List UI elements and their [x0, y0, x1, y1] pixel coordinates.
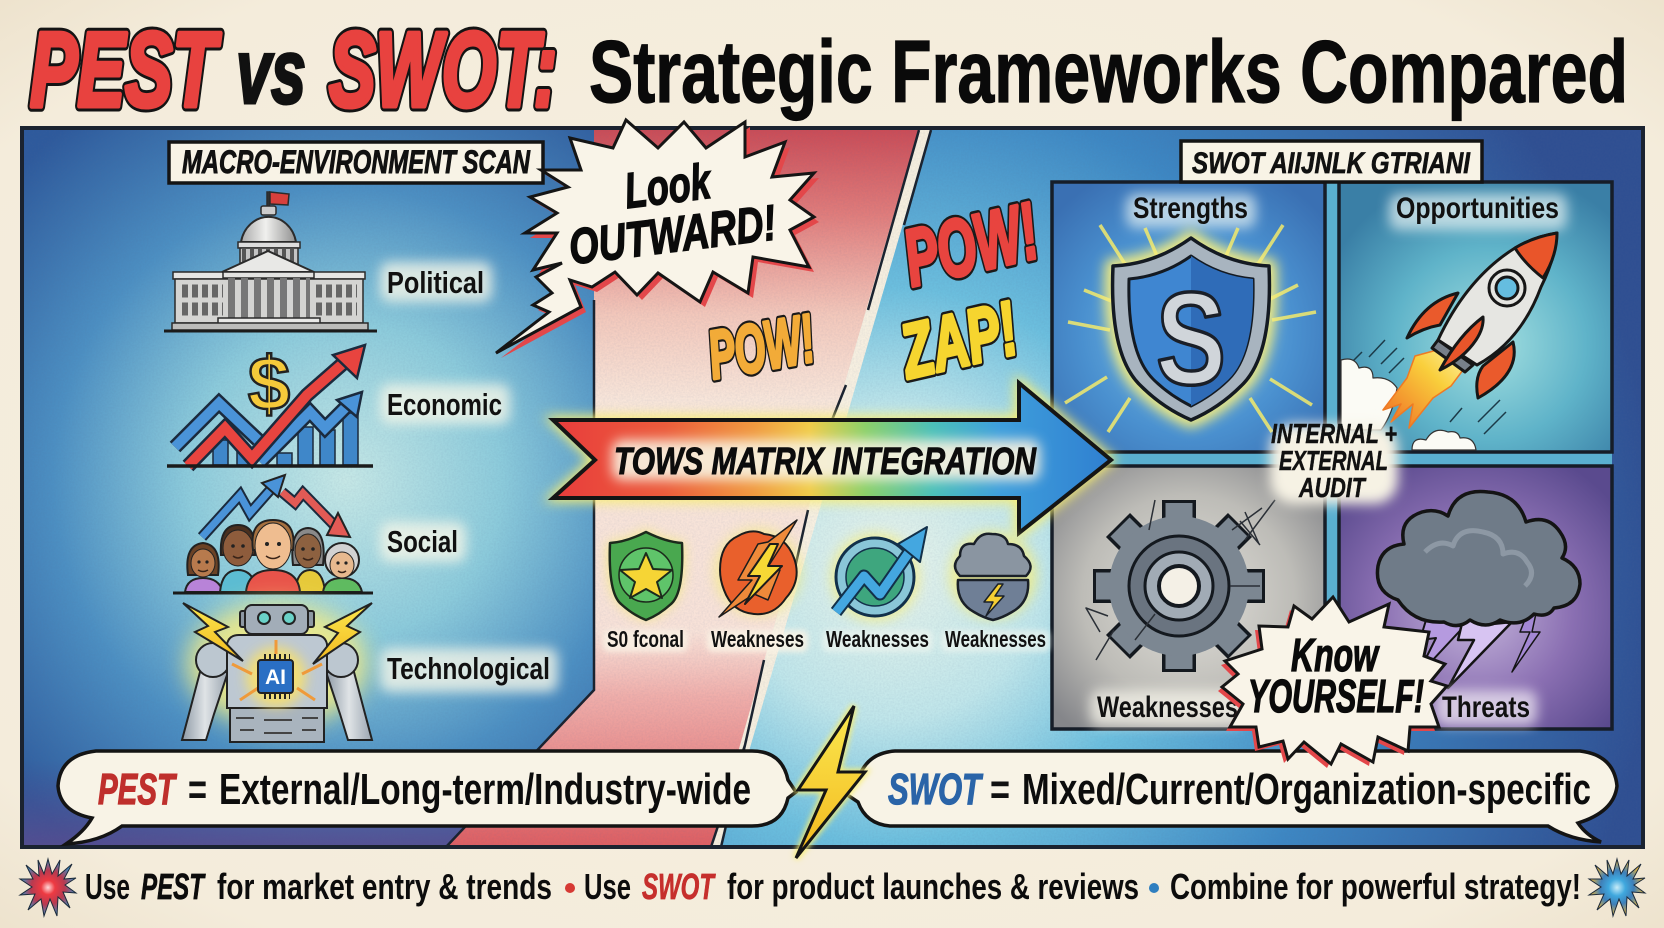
icon: rocket — [1341, 233, 1557, 450]
callout: internal + external audit: INTERNAL + — [1271, 418, 1397, 449]
label: Economic: Economic — [387, 387, 502, 422]
icon: storm cloud and lightning — [1377, 492, 1580, 688]
purple lower edge of PEST side — [24, 787, 462, 845]
icon: society group with trend arrows — [173, 475, 373, 593]
icon: green star shield — [608, 530, 684, 620]
speech bubble: PEST summary: External/Long-term/Industry-wide — [219, 765, 751, 814]
icon: cracked gear — [1086, 500, 1275, 672]
quadrant: Strengths — [1052, 182, 1325, 452]
takeaway segments: Use — [85, 866, 130, 907]
label: macro-environment scan: MACRO-ENVIRONMENT SCAN — [182, 144, 531, 180]
takeaway segments: Use — [584, 866, 631, 907]
icon: central lightning bolt — [796, 706, 865, 858]
arrow: TOWS matrix integration: TOWS MATRIX INTEGRATION — [614, 441, 1037, 483]
takeaway segments: for market entry & trends — [217, 866, 552, 907]
takeaway segments: PEST — [141, 866, 206, 907]
title word: SWOT: SWOT: — [329, 11, 557, 129]
sound effect: POW red: POW! — [896, 186, 1046, 303]
icon: AI robot — [182, 603, 372, 742]
label: macro-environment scan — [169, 142, 543, 183]
icon: economic chart: $ — [248, 342, 290, 427]
burst text — [1248, 629, 1424, 722]
label: weaknesses 1: Weakneses — [711, 626, 804, 652]
bottom takeaway line — [20, 859, 1645, 916]
icon: capitol building — [164, 192, 377, 331]
sound effect: POW orange — [703, 300, 820, 394]
label: weaknesses 2: Weaknesses — [826, 626, 929, 652]
speech bubble: PEST summary: PEST — [98, 765, 177, 814]
label: Social: Social — [387, 524, 458, 559]
title word: SWOT: SWOT: — [329, 11, 557, 129]
speech bubble: SWOT summary — [843, 751, 1617, 842]
label: Political: Political — [387, 265, 484, 300]
burst text: OUTWARD! — [566, 194, 779, 275]
icon: flame bolt badge — [714, 520, 802, 617]
quadrant: Weaknesses — [1052, 466, 1325, 729]
takeaway segments: for product launches & reviews — [727, 866, 1139, 907]
quadrant: Threats — [1339, 466, 1612, 729]
label: Technological — [380, 648, 558, 692]
panel: SWOT blue side — [721, 128, 1643, 847]
burst: Look OUTWARD — [496, 120, 819, 358]
label: weaknesses 3: Weaknesses — [945, 626, 1046, 652]
panel: PEST blue side — [22, 128, 594, 847]
title word: PEST — [30, 11, 222, 129]
speech bubble: PEST summary: = — [188, 765, 207, 814]
icon: green circle arrow — [831, 527, 927, 621]
burst text: Look — [621, 153, 715, 219]
takeaway segments: SWOT — [642, 866, 716, 907]
icon: red starburst — [20, 859, 76, 916]
speech bubble: SWOT summary: = — [990, 765, 1010, 814]
title — [30, 11, 1628, 129]
takeaway segments — [85, 866, 1581, 907]
title word: PEST: PEST — [30, 11, 222, 129]
sound effect: ZAP yellow: ZAP! — [892, 286, 1025, 395]
burst: Know YOURSELF — [1218, 597, 1447, 768]
burst text — [560, 146, 779, 275]
speech bubble: SWOT summary: SWOT — [888, 765, 983, 814]
opportunities heading: Opportunities — [1396, 192, 1559, 225]
sound effect: ZAP yellow — [892, 286, 1025, 395]
TOWS strategy icons row — [603, 520, 1050, 652]
icon: shield — [1065, 225, 1316, 432]
quadrant frame — [1052, 182, 1612, 729]
callout: internal + external audit: AUDIT — [1298, 472, 1367, 503]
label: SWOT analysis strip — [1181, 141, 1482, 182]
icon: AI robot: AI — [265, 666, 286, 689]
speech bubble: PEST summary — [58, 751, 796, 844]
burst text: YOURSELF! — [1248, 670, 1424, 722]
sound effect: POW red — [896, 186, 1046, 303]
title word: vs: vs — [236, 21, 306, 123]
sound effect: POW orange: POW! — [703, 300, 820, 394]
threats heading: Threats — [1442, 691, 1530, 724]
icon: economic chart — [167, 342, 373, 466]
quadrant: Opportunities — [1339, 182, 1612, 452]
watercolor grain — [171, 130, 1072, 845]
red central wedge — [446, 128, 919, 847]
sound effect: POW red: POW! — [896, 186, 1046, 303]
sound effect: ZAP yellow: ZAP! — [892, 286, 1025, 395]
strengths heading: Strengths — [1133, 192, 1248, 225]
icon: blue starburst — [1589, 859, 1645, 916]
label: SWOT analysis strip: SWOT AIIJNLK GTRIANI — [1192, 147, 1471, 180]
burst text: Know — [1291, 629, 1380, 681]
weaknesses heading: Weaknesses — [1097, 691, 1238, 724]
title word: SWOT — [329, 11, 557, 129]
title word: PEST: PEST — [30, 11, 222, 129]
label: Technological: Technological — [387, 651, 550, 686]
arrow: TOWS matrix integration — [553, 383, 1111, 533]
comic panel background — [22, 128, 1643, 847]
label: SO tactical: S0 fconal — [607, 626, 684, 652]
sound effect: POW orange: POW! — [703, 300, 820, 394]
icon: cloud shield — [949, 531, 1037, 620]
callout: internal + external audit — [1270, 418, 1398, 504]
callout: internal + external audit: EXTERNAL — [1279, 445, 1388, 476]
icon: shield: S — [1156, 265, 1226, 412]
